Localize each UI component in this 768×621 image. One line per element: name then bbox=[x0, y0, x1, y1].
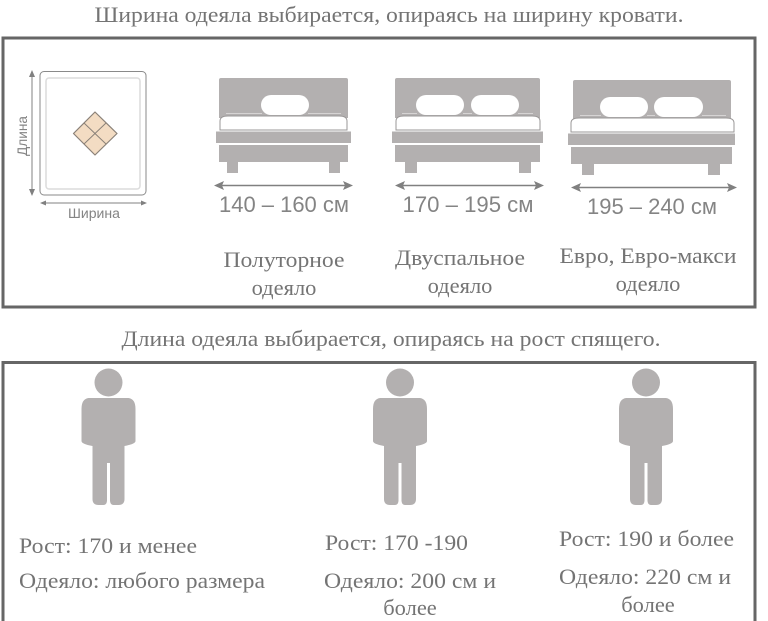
text: height 170-190 bbox=[324, 530, 496, 620]
label: double blanket bbox=[395, 245, 525, 298]
heading: blanket width: Ширина одеяла выбирается, опираясь на ширину кровати. bbox=[94, 2, 684, 27]
label: double blanket: одеяло bbox=[428, 273, 492, 298]
icon: blanket with dimensions: Ширина bbox=[68, 206, 121, 221]
text: height 170-190: Рост: 170 -190 bbox=[325, 530, 468, 555]
panel: blanket width bbox=[3, 38, 755, 307]
panel: blanket length bbox=[3, 362, 755, 621]
label: euro blanket: Евро, Евро-макси bbox=[560, 243, 736, 268]
icon: single bed bbox=[214, 78, 353, 217]
label: single blanket bbox=[224, 247, 345, 300]
text: height up to 170: Рост: 170 и менее bbox=[19, 533, 197, 558]
heading: blanket length: Длина одеяла выбирается, опираясь на рост спящего. bbox=[122, 326, 660, 351]
text: height 170-190: Одеяло: 200 см и bbox=[324, 568, 496, 593]
label: euro blanket: одеяло bbox=[616, 271, 680, 296]
text: height 190 and more: Одеяло: 220 см и bbox=[559, 564, 731, 589]
icon: double bed bbox=[392, 78, 544, 217]
label: single blanket: Полуторное bbox=[224, 247, 345, 272]
icon: double bed: 170 – 195 см bbox=[402, 192, 534, 217]
icon: euro bed: 195 – 240 см bbox=[587, 194, 717, 219]
text: height up to 170 bbox=[19, 533, 265, 593]
icon: blanket with dimensions bbox=[15, 70, 147, 221]
text: height 190 and more: более bbox=[621, 592, 675, 617]
text: height up to 170: Одеяло: любого размера bbox=[19, 568, 265, 593]
label: double blanket: Двуспальное bbox=[395, 245, 525, 270]
icon: person medium bbox=[373, 368, 427, 505]
icon: single bed: 140 – 160 см bbox=[219, 192, 349, 217]
text: height 190 and more: Рост: 190 и более bbox=[559, 526, 734, 551]
text: height 170-190: более bbox=[383, 595, 437, 620]
icon: person short bbox=[82, 368, 136, 505]
text: height 190 and more bbox=[559, 526, 734, 617]
label: single blanket: одеяло bbox=[252, 275, 316, 300]
icon: blanket with dimensions: Длина bbox=[15, 116, 30, 156]
label: euro blanket bbox=[560, 243, 736, 296]
icon: person tall bbox=[619, 368, 673, 505]
icon: euro bed bbox=[568, 80, 737, 219]
